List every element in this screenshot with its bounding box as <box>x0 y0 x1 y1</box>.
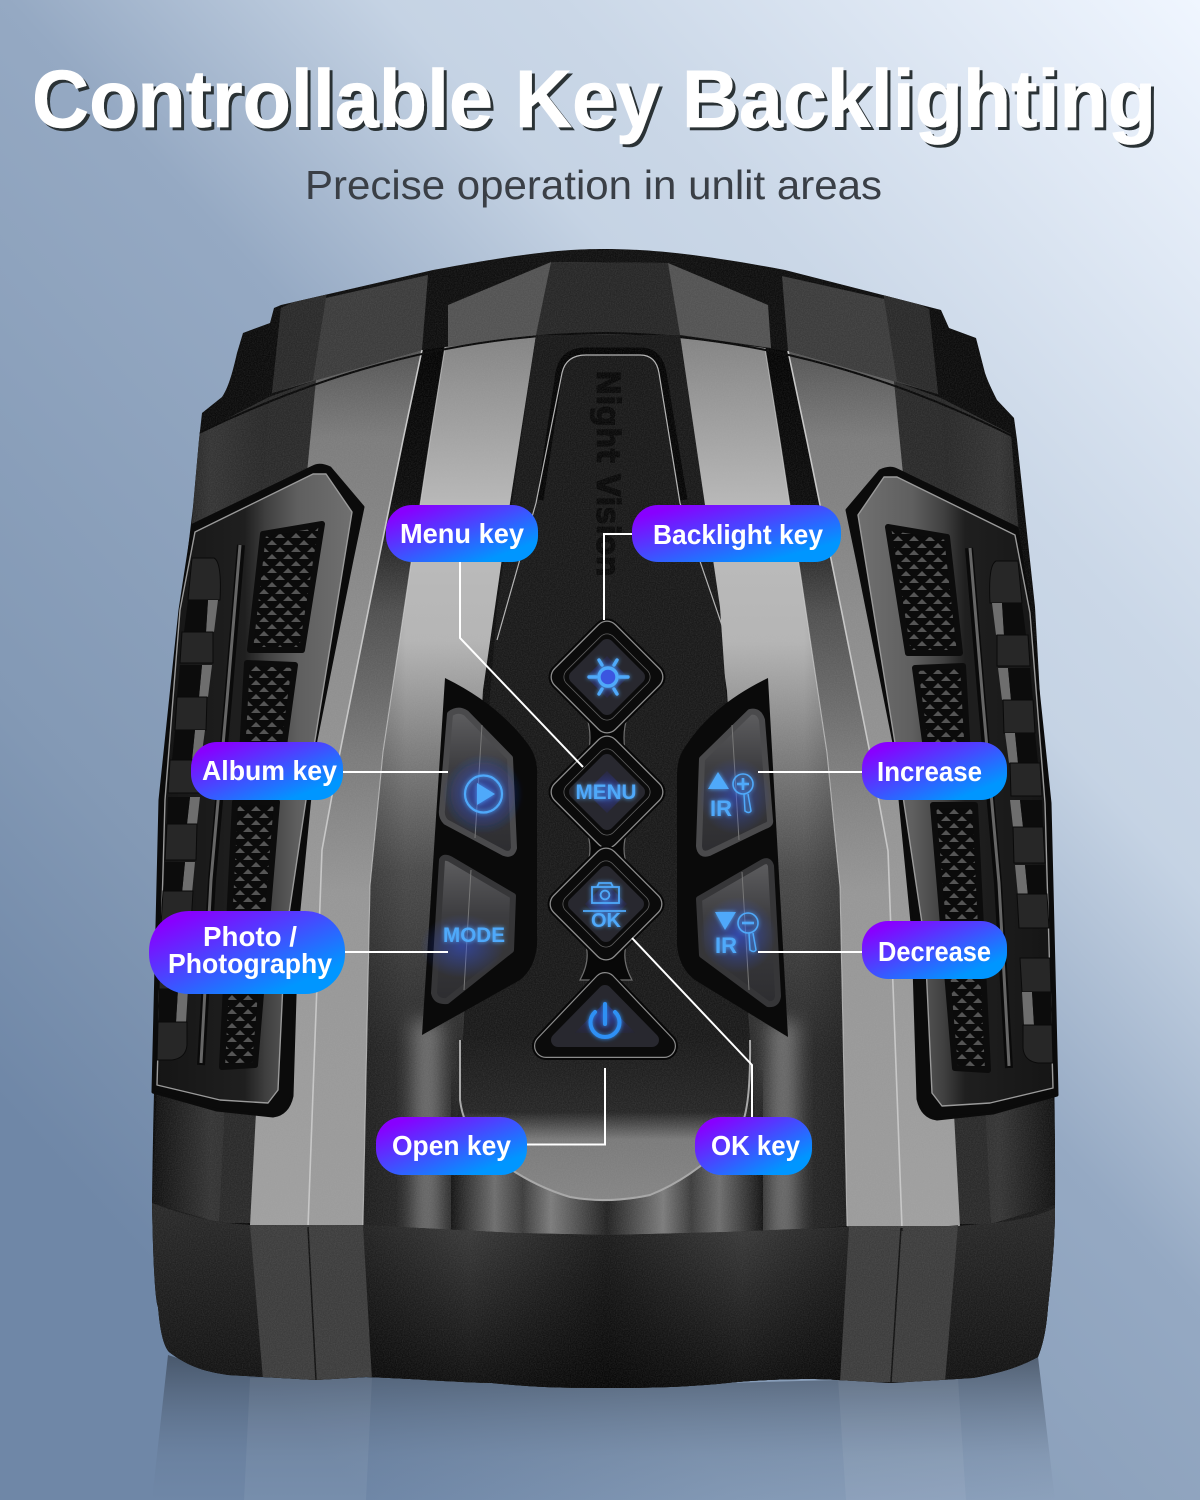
center key cluster <box>546 633 664 1046</box>
necks <box>580 715 632 980</box>
top cap <box>199 262 1014 437</box>
label: menu key: Menu key <box>400 518 524 549</box>
lower silver highlights <box>451 1070 763 1235</box>
right grip panel <box>847 468 1057 1119</box>
label: ok key <box>695 1117 812 1175</box>
ok key <box>562 860 650 948</box>
recess highlight line <box>497 355 727 640</box>
icon: IR decrease: IR <box>715 933 737 958</box>
icon: camera and OK: OK <box>591 910 622 932</box>
left grip panel <box>153 465 363 1116</box>
key: decrease <box>699 861 778 1004</box>
mode key label <box>420 914 505 978</box>
key: increase <box>699 712 770 854</box>
label: open key <box>376 1117 527 1175</box>
label: increase: Increase <box>877 756 982 787</box>
label: photo / photography: Photography <box>168 948 332 979</box>
icon: IR increase <box>699 758 771 834</box>
icon: IR increase: IR <box>710 796 732 821</box>
label: decrease <box>862 921 1007 979</box>
embossed product text: Night Vision <box>589 370 627 577</box>
right key housing <box>677 678 788 1037</box>
left key housing <box>422 678 537 1035</box>
icon: sun <box>589 660 628 694</box>
label: photo / photography: Photo / <box>203 921 297 952</box>
subtitle: Precise operation in unlit areas <box>305 162 882 208</box>
label: open key: Open key <box>392 1130 511 1161</box>
device body <box>140 240 1070 1400</box>
surface grain <box>140 240 1070 1400</box>
label: album key <box>191 742 343 800</box>
side bands <box>152 275 1058 1381</box>
icon: IR decrease <box>700 897 776 973</box>
icon: camera and OK <box>583 883 626 932</box>
label: album key: Album key <box>202 755 337 786</box>
pocket shape <box>460 1040 750 1200</box>
label: backlight key <box>632 505 841 562</box>
backlight key <box>563 633 651 721</box>
logo recess <box>540 351 684 500</box>
menu key <box>563 748 651 836</box>
body shell <box>140 240 1070 1400</box>
key: album <box>442 711 514 854</box>
menu key label: MENU <box>576 781 636 804</box>
key: mode <box>434 858 513 1001</box>
label: ok key: OK key <box>711 1130 800 1161</box>
label: backlight key: Backlight key <box>653 519 823 550</box>
icon: play <box>443 754 523 834</box>
connector lines <box>343 534 862 1144</box>
label: increase <box>862 742 1007 800</box>
label: decrease: Decrease <box>878 936 991 967</box>
pocket outline <box>460 1040 750 1200</box>
reflection below device <box>152 1355 1055 1500</box>
label: menu key <box>386 505 538 562</box>
center dark panel <box>463 335 754 1112</box>
icon: power <box>590 1004 619 1037</box>
power key <box>546 984 664 1046</box>
mode key label: MODE <box>443 924 505 947</box>
title: Controllable Key Backlighting <box>32 54 1156 145</box>
label: photo / photography <box>149 911 345 994</box>
bottom section <box>140 1203 1060 1400</box>
